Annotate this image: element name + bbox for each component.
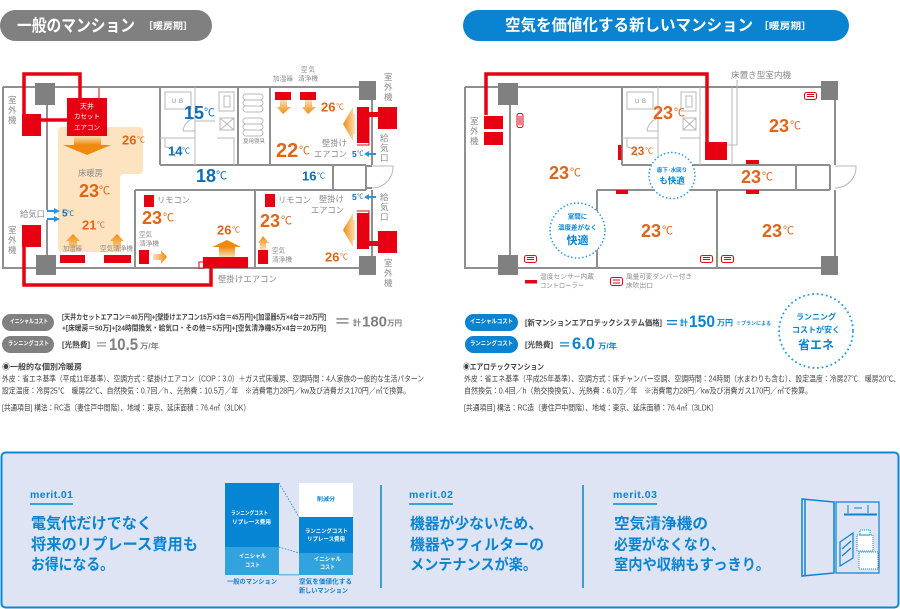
upper right room: 壁掛け	[322, 138, 347, 148]
outdoor unit labels: 室	[8, 95, 17, 105]
living room temperatures: ℃	[97, 220, 105, 230]
cost summary: new	[465, 313, 771, 353]
floor plan: new condominium	[465, 70, 856, 290]
heading: new condominium: 空気を価値化する新しいマンション	[505, 16, 753, 34]
outdoor unit labels: 気	[380, 143, 389, 153]
duct and floor-standing indoor unit	[484, 70, 791, 160]
callout: low running cost: 省エネ	[798, 337, 834, 352]
cool corridor and bath temperatures: ℃	[204, 107, 215, 119]
callout: low running cost: コストが安く	[792, 324, 840, 334]
outdoor unit labels: 室	[8, 225, 17, 235]
building walls: UB	[635, 99, 646, 105]
uniform temperatures: ℃	[762, 171, 773, 183]
cost comparison chart: 空気を価値化する	[299, 576, 352, 586]
lower pipe and wall AC: 壁掛けエアコン	[218, 274, 277, 284]
merit 2 text	[409, 489, 544, 574]
living room temperatures: 床暖房	[78, 168, 103, 178]
lower middle room: 26	[217, 222, 231, 238]
outdoor unit labels: 機	[8, 115, 17, 125]
lower right room: ℃	[340, 252, 348, 262]
cool corridor and bath temperatures: 14	[168, 144, 183, 158]
cost summary: new: 計	[680, 318, 688, 328]
cost summary: conventional: +[床暖房＝50万]+[24時間換気・給気口・その他＝5万円]+[空気清浄機5万×4台＝20万円]	[62, 322, 326, 332]
refrigerant pipes and ceiling cassette AC: エアコン	[74, 124, 100, 132]
callout: comfortable between rooms: 温度差がなく	[558, 222, 597, 232]
legend: sensor controller	[525, 272, 595, 290]
cost summary: conventional: [光熱費]	[62, 340, 90, 350]
notes: conventional: 設定温度：冷房25℃ 暖房22℃、自然換気：0.7回／h 、光熱費：10.5万／年 ※消費電力28円／kw及び消費ガス170円／㎥で換算。	[2, 386, 410, 396]
outdoor unit labels: 口	[380, 212, 389, 222]
merit 1 text: merit.01	[30, 489, 73, 501]
lower right room: 壁掛け	[319, 194, 344, 204]
uniform temperatures: 23	[653, 103, 673, 123]
outdoor unit labels: 給	[380, 192, 389, 202]
cost summary: conventional: 10.5	[109, 336, 138, 354]
outdoor unit labels: 外	[8, 105, 17, 115]
summer bedding closet	[172, 94, 265, 145]
lower middle room: 空気	[139, 230, 152, 238]
outdoor unit label	[470, 116, 479, 146]
living room temperatures: 23	[79, 181, 99, 201]
uniform temperatures: 23	[741, 167, 761, 187]
lower right room: エアコン	[311, 205, 344, 215]
legend: floor vent	[610, 272, 692, 290]
notes: conventional: [共通項目] 構法：RC造（妻住戸中間階）、地域：東京、延床面積：76.4㎡（3LDK）	[2, 402, 250, 412]
lower right room: ℃	[357, 192, 364, 200]
outdoor unit labels: 外	[384, 268, 393, 278]
outdoor unit labels: 口	[380, 153, 389, 163]
temperature sensors	[616, 145, 759, 194]
merit 1 text	[30, 489, 198, 574]
outdoor unit labels: 機	[384, 278, 393, 288]
merit 3 text: merit.03	[613, 489, 657, 501]
upper right room	[273, 64, 397, 162]
refrigerant pipes and ceiling cassette AC: カセット	[74, 112, 100, 120]
uniform temperatures	[549, 103, 801, 241]
cost summary: conventional: [天井カセットエアコン＝40万円]+[壁掛けエアコン15万×3台＝45万円]+[加湿器5万×4台＝20万円]	[62, 312, 326, 322]
outdoor unit labels	[8, 72, 393, 288]
notes: new: 自然換気：0.4回／h（熱交換換気）、光熱費：6.0万／年 ※消費電力28円／kw及び消費ガス170円／㎥で換算。	[464, 386, 812, 396]
outdoor unit labels: 外	[8, 235, 17, 245]
outdoor unit labels: 室	[384, 258, 393, 268]
duct and floor-standing indoor unit: 床置き型室内機	[731, 70, 791, 80]
upper right room: 空気	[301, 64, 316, 74]
panel: merits	[2, 452, 898, 608]
lower middle room: 23	[142, 208, 162, 228]
floor heating area	[58, 127, 143, 252]
cost comparison chart: 削減分	[317, 495, 336, 503]
summer bedding closet: UB	[172, 99, 183, 105]
cost comparison chart: ランニングコスト	[305, 527, 348, 535]
notes: conventional: 外皮：省エネ基準（平成11年基準）、空調方式：壁掛けエアコン（COP：3.0）＋ガス式床暖房、空調時間：4人家族の一般的な生活パターン	[2, 374, 424, 384]
notes: new	[463, 362, 900, 412]
cost comparison chart: コスト	[320, 564, 335, 571]
merit 2 text: メンテナンスが楽。	[410, 556, 537, 574]
cost summary: conventional: 180	[362, 314, 387, 330]
outdoor unit label: 室	[470, 116, 479, 126]
outdoor unit labels: 室	[384, 72, 393, 82]
heading: conventional condominium: 一般のマンション	[17, 16, 135, 36]
cost summary: new: ランニングコスト	[470, 340, 513, 348]
cost comparison chart: イニシャル	[239, 553, 266, 560]
uniform temperatures: ℃	[662, 225, 673, 237]
cost summary: conventional: 万/年	[140, 340, 160, 350]
cost summary: conventional: 計	[353, 318, 361, 328]
merit 3 text	[613, 489, 770, 574]
upper right room: ℃	[357, 150, 364, 158]
cost comparison chart	[225, 483, 353, 594]
building walls	[3, 81, 393, 275]
cost comparison chart: リプレース費用	[232, 518, 271, 526]
lower right room	[258, 192, 397, 264]
outdoor unit label: 機	[470, 136, 479, 146]
living room temperatures: 26	[122, 132, 136, 148]
merit 2 text: 機器が少ないため、	[410, 514, 543, 532]
callout: comfortable in corridor and wet areas: も快適	[659, 176, 685, 186]
cost comparison chart: リプレース費用	[307, 535, 345, 543]
outdoor unit labels: 気	[380, 202, 389, 212]
upper right room: 5	[352, 149, 357, 159]
cost summary: new: イニシャルコスト	[470, 318, 513, 326]
merit 2 text: 機器やフィルターの	[410, 536, 544, 554]
building walls	[465, 80, 856, 275]
outdoor unit label: 外	[470, 126, 479, 136]
refrigerant pipes and ceiling cassette AC	[22, 74, 111, 155]
cost summary: new: 万/年	[598, 340, 618, 350]
heading: new condominium	[463, 10, 849, 41]
cost summary: conventional: ランニングコスト	[8, 340, 49, 348]
outdoor unit labels: 外	[384, 82, 393, 92]
merit 3 text: 空気清浄機の	[614, 514, 708, 532]
floor plan: conventional condominium	[3, 64, 397, 288]
living room temperatures	[47, 132, 145, 232]
cost summary: new: ＝	[665, 315, 679, 331]
outdoor unit labels: 給	[380, 133, 389, 143]
legend: floor vent: 風量可変ダンパー付き	[626, 272, 692, 280]
notes: conventional: ◉一般的な個別冷暖房	[2, 362, 82, 372]
refrigerant pipes and ceiling cassette AC: 天井	[80, 102, 94, 110]
notes: new: [共通項目] 構法：RC造（妻住戸中間階）、地域：東京、延床面積：76.4㎡（3LDK）	[464, 402, 718, 412]
upper right room: 26	[321, 100, 335, 114]
uniform temperatures: 23	[769, 116, 789, 136]
cool corridor and bath temperatures: ℃	[182, 146, 190, 156]
outdoor unit labels: 給気口	[20, 209, 45, 219]
humidifier and air purifier, living room	[60, 234, 134, 263]
uniform temperatures: 23	[762, 221, 782, 241]
cost summary: conventional: 万円	[387, 318, 402, 328]
cost summary: new: 万円	[717, 318, 733, 328]
lower middle room	[139, 195, 241, 264]
cost comparison chart: イニシャル	[314, 556, 341, 563]
cost summary: new: ※プランによる	[736, 320, 771, 327]
legend: floor vent: 床吹出口	[626, 280, 653, 290]
merit 2 text: merit.02	[409, 489, 453, 501]
callout: low running cost	[779, 294, 853, 368]
living room temperatures: ℃	[67, 210, 74, 218]
uniform temperatures: 23	[549, 163, 569, 183]
lower right room: 清浄機	[272, 254, 293, 264]
living room temperatures: 5	[62, 208, 68, 220]
lower right room: 26	[325, 250, 339, 264]
uniform temperatures: ℃	[570, 167, 581, 179]
uniform temperatures: ℃	[674, 107, 685, 119]
lower right room: 5	[352, 192, 357, 202]
upper right room: 清浄機	[298, 74, 319, 82]
cost comparison chart: 一般のマンション	[227, 576, 277, 586]
merit 1 text: 将来のリプレース費用も	[31, 536, 198, 554]
uniform temperatures: 23	[631, 144, 645, 158]
humidifier and air purifier, living room: 加湿器	[63, 244, 82, 252]
callout: low running cost: ランニング	[796, 312, 836, 322]
heading: conventional condominium: ［暖房期］	[143, 20, 193, 31]
legend: sensor controller: 温度センサー内蔵	[540, 272, 595, 280]
living room temperatures: ℃	[137, 136, 145, 144]
cool corridor and bath temperatures: 16	[302, 168, 316, 184]
upper right room: 加湿器	[273, 74, 294, 82]
lower right room: リモコン	[278, 195, 311, 205]
cost summary: conventional: ＝	[95, 338, 108, 352]
merit 3 text: 室内や収納もすっきり。	[614, 556, 770, 574]
heading: new condominium: ［暖房期］	[758, 20, 812, 31]
uniform temperatures: ℃	[790, 120, 801, 132]
cool corridor and bath temperatures: 18	[196, 166, 216, 186]
lower middle room: 清浄機	[139, 238, 160, 248]
upper right room: ℃	[336, 102, 344, 112]
upper right room: エアコン	[314, 149, 347, 159]
callout: comfortable between rooms	[550, 203, 605, 258]
heading: conventional condominium	[0, 10, 212, 41]
cool corridor and bath temperatures	[168, 103, 325, 186]
cool corridor and bath temperatures: 15	[184, 103, 204, 123]
cost comparison chart: 新しいマンション	[299, 586, 348, 594]
notes: new: ◉エアロテックマンション	[463, 362, 544, 372]
lower middle room: ℃	[232, 226, 240, 234]
uniform temperatures: ℃	[645, 146, 653, 156]
living room temperatures: ℃	[99, 185, 110, 197]
cost summary: new: 6.0	[572, 335, 595, 353]
upper right room: ℃	[299, 145, 310, 157]
cost comparison chart: コスト	[245, 562, 260, 569]
callout: comfortable in corridor and wet areas	[649, 152, 695, 198]
callout: comfortable between rooms: 快適	[566, 233, 588, 247]
lower right room: 23	[260, 211, 280, 231]
callout: comfortable in corridor and wet areas: 廊下･水回り	[657, 166, 687, 174]
cool corridor and bath temperatures: ℃	[317, 172, 325, 180]
cool corridor and bath temperatures: ℃	[216, 170, 227, 182]
cost summary: conventional	[2, 312, 402, 354]
cost summary: new: ＝	[558, 338, 571, 352]
humidifier and air purifier, living room: 空気清浄機	[100, 244, 134, 252]
merit 3 text: 必要がなくなり、	[614, 536, 725, 554]
lower right room: ℃	[281, 215, 292, 227]
floor vents	[517, 92, 816, 262]
icon: closet with tidy storage	[802, 499, 879, 576]
lower middle room: リモコン	[157, 195, 190, 205]
cost comparison chart: ランニングコスト	[231, 509, 268, 517]
cost summary: conventional: イニシャルコスト	[10, 318, 48, 326]
uniform temperatures: ℃	[783, 225, 794, 237]
lower middle room: ℃	[163, 212, 174, 224]
summer bedding closet: 夏用寝具	[243, 137, 265, 145]
lower pipe and wall AC	[22, 225, 277, 285]
cost summary: new: 150	[689, 313, 715, 331]
lower right room: 空気	[272, 246, 286, 254]
living room temperatures: 21	[82, 218, 96, 232]
cost summary: new: [光熱費]	[525, 340, 553, 350]
uniform temperatures: 23	[641, 221, 661, 241]
upper right room: 22	[276, 140, 298, 162]
outdoor unit labels: 機	[8, 245, 17, 255]
merit 1 text: お得になる。	[31, 556, 114, 574]
legend: sensor controller: コントローラー	[540, 282, 584, 290]
callout: comfortable between rooms: 室間に	[568, 212, 587, 220]
cost summary: new: [新マンションエアロテックシステム価格]	[525, 318, 662, 328]
merit 1 text: 電気代だけでなく	[31, 514, 152, 532]
notes: conventional	[2, 362, 424, 412]
outdoor unit labels: 機	[384, 92, 393, 102]
cost summary: conventional: ＝	[334, 312, 351, 332]
